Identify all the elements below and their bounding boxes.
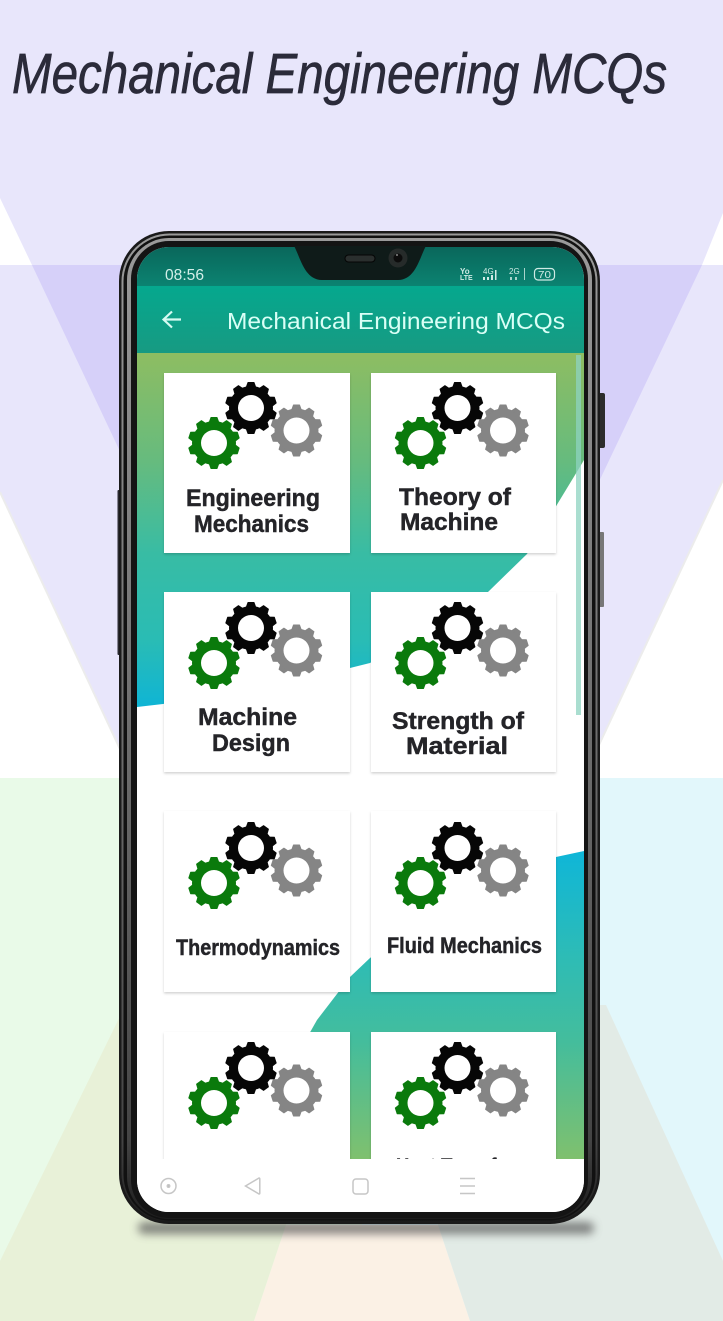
power button [598,532,604,607]
battery level: 70 [538,270,552,281]
card: Heat Transfer [371,1032,556,1212]
icon: gears [188,602,322,688]
label line 2: Material [406,733,508,760]
card: Thermodynamics [164,811,350,992]
icon: gears [395,382,529,468]
card panel [371,1032,556,1212]
top gradient shape [137,353,584,707]
phone shadow [138,1222,594,1234]
cards list [164,373,556,1212]
label line 2: Mechanics [194,511,309,538]
icon: back arrow [164,312,181,328]
icon: gears [395,1042,529,1128]
nav bar background [137,1159,584,1212]
app bar [137,286,584,353]
screen background [137,247,584,1212]
icon: home square [353,1179,368,1194]
card panel [371,592,556,772]
camera [388,248,408,268]
card: Engineering Mechanics [164,373,350,553]
card panel [371,373,556,553]
phone outer edge stripe [122,234,598,1222]
scrollbar [576,355,581,715]
label line 1: Machine [198,704,297,731]
2G signal: 2G [509,267,520,276]
phone outer frame [119,231,600,1224]
label line 1: Engineering [186,485,320,512]
status icons [460,267,554,282]
icon: assistant circle [161,1178,176,1194]
card: Fluid Mechanics [371,811,556,992]
card: cropped seventh item [163,1032,351,1159]
app bar title: Mechanical Engineering MCQs [227,308,565,334]
phone dark stripe [124,236,596,1220]
label line 1: Strength of [392,708,525,735]
card panel [164,811,350,992]
label: Fluid Mechanics [387,933,542,958]
screen [137,247,584,1212]
battery [534,268,554,280]
network label: Yo [460,267,470,276]
card panel [371,811,556,992]
icon: back triangle [246,1178,260,1194]
status bar [137,247,584,286]
phone metal band [127,238,592,1219]
icon: menu lines [460,1178,475,1194]
label line 2: Design [212,730,290,757]
card: Theory of Machine [371,373,556,553]
label: Thermodynamics [176,935,340,960]
phone bezel [131,241,588,1218]
phone [118,231,605,1224]
notch [294,246,426,280]
4G bars [483,270,496,280]
label line 1: Theory of [399,484,512,511]
card panel [164,373,350,553]
2G bars [510,268,525,280]
icon: gears [188,382,322,468]
status time: 08:56 [165,267,204,284]
label: Heat Transfer [396,1154,514,1181]
LTE label: LTE [460,275,473,282]
volume button [598,393,605,448]
icon: gears [188,822,322,908]
navigation bar [137,1159,584,1212]
left side button [118,490,122,655]
bottom gradient shape [310,851,584,1159]
speaker [345,255,375,262]
card panel [163,1032,351,1159]
4G signal: 4G [483,267,494,276]
icon: gears [188,1042,322,1128]
label line 2: Machine [400,509,498,536]
card panel [164,592,350,772]
card: Strength of Material [371,592,556,772]
icon: gears [395,822,529,908]
icon: gears [395,602,529,688]
card: Machine Design [164,592,350,772]
